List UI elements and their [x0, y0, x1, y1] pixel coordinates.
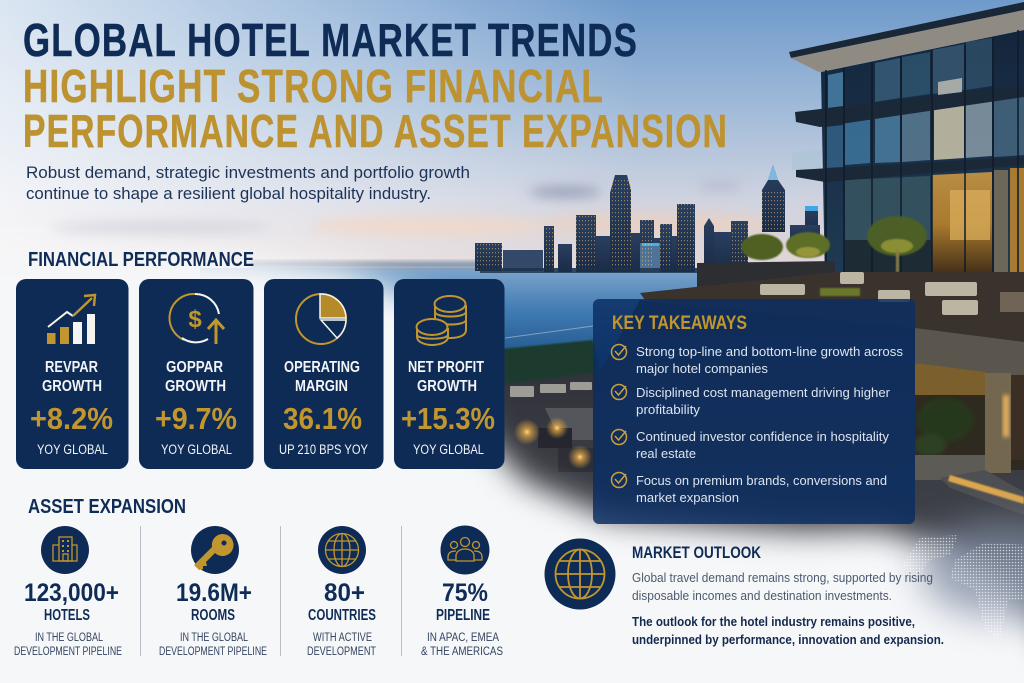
conclusion text: The outlook for the hotel industry remains positive,: [632, 615, 915, 629]
stat: countries: [307, 526, 376, 658]
conclusion text: underpinned by performance, innovation and expansion.: [632, 633, 944, 647]
skyline: [250, 165, 820, 273]
note: UP 210 BPS YOY: [279, 442, 368, 457]
title: [23, 14, 728, 157]
note: YOY GLOBAL: [161, 442, 232, 457]
trees: [741, 216, 927, 272]
takeaway 1: [612, 344, 904, 376]
water: [200, 268, 720, 378]
number: 19.6M+: [176, 579, 252, 607]
icon: pie chart: [296, 294, 346, 344]
takeaway 4: Focus on premium brands, conversions and: [636, 473, 887, 488]
label: OPERATING: [284, 359, 360, 376]
takeaway 3: Continued investor confidence in hospitality: [636, 429, 889, 444]
title: GLOBAL HOTEL MARKET TRENDS: [23, 14, 638, 66]
icon: bar chart with rising arrow: [47, 295, 95, 344]
subtitle: Robust demand, strategic investments and portfolio growth: [26, 164, 470, 182]
card: GOPPAR growth: [139, 279, 254, 469]
takeaway 2: profitability: [636, 402, 701, 417]
heading: financial performance: FINANCIAL PERFORMANCE: [28, 248, 254, 271]
heading: MARKET OUTLOOK: [632, 544, 761, 562]
label: NET PROFIT: [408, 359, 484, 376]
label: HOTELS: [44, 607, 90, 624]
title: PERFORMANCE AND ASSET EXPANSION: [23, 105, 728, 157]
note: YOY GLOBAL: [413, 442, 484, 457]
icon: coin stacks: [416, 296, 466, 345]
takeaway 1: major hotel companies: [636, 361, 768, 376]
card: RevPAR growth: [16, 279, 128, 469]
icon: hotel building: [41, 526, 89, 574]
label: REVPAR: [45, 359, 98, 376]
note: DEVELOPMENT: [307, 646, 376, 658]
subtitle: continue to shape a resilient global hospitality industry.: [26, 185, 431, 203]
conclusion text: [632, 615, 944, 647]
note: YOY GLOBAL: [37, 442, 108, 457]
label: MARGIN: [295, 378, 348, 395]
note: DEVELOPMENT PIPELINE: [14, 646, 122, 658]
stat: pipeline: [421, 526, 503, 658]
label: GROWTH: [42, 378, 102, 395]
body text: [632, 571, 933, 603]
panel: key takeaways: [593, 299, 915, 524]
number: 75%: [442, 579, 488, 607]
icon: globe: [318, 526, 366, 574]
panel: market outlook: [544, 538, 944, 647]
card: net profit growth: [394, 279, 504, 469]
note: IN THE GLOBAL: [35, 632, 103, 644]
label: GROWTH: [417, 378, 477, 395]
heading: asset expansion: ASSET EXPANSION: [28, 495, 186, 518]
note: DEVELOPMENT PIPELINE: [159, 646, 267, 658]
note: [159, 632, 267, 658]
grey mist behind world map: [920, 522, 1024, 618]
note: [307, 632, 376, 658]
icon: key: [191, 526, 239, 574]
value: 36.1%: [283, 401, 362, 436]
stat: hotels: [14, 526, 122, 658]
note: IN APAC, EMEA: [427, 632, 499, 644]
label: [284, 359, 360, 395]
takeaway 3: real estate: [636, 446, 696, 461]
number: 123,000+: [24, 579, 119, 607]
heading: KEY TAKEAWAYS: [612, 313, 747, 334]
icon: dollar cycle with up arrow: $: [188, 306, 202, 333]
stat: rooms: [159, 526, 267, 658]
takeaway 3: [612, 429, 889, 461]
takeaway 4: market expansion: [636, 490, 739, 505]
takeaway 4: [612, 472, 887, 505]
value: +9.7%: [155, 401, 237, 436]
label: [408, 359, 484, 395]
value: +15.3%: [401, 401, 495, 436]
subtitle: [26, 164, 470, 203]
label: ROOMS: [191, 607, 235, 624]
terrace: [482, 261, 1024, 646]
icon: globe: [544, 538, 616, 610]
icon: dollar cycle with up arrow: [169, 294, 224, 344]
world map dots: [902, 535, 1024, 640]
icon: people: [440, 526, 490, 574]
hotel building: [789, 2, 1024, 285]
title: HIGHLIGHT STRONG FINANCIAL: [23, 60, 604, 112]
label: [165, 359, 226, 395]
card: operating margin: [264, 279, 384, 469]
body text: disposable incomes and destination investments.: [632, 589, 892, 603]
takeaway 1: Strong top-line and bottom-line growth across: [636, 344, 904, 359]
note: [14, 632, 122, 658]
label: COUNTRIES: [308, 607, 376, 624]
note: WITH ACTIVE: [313, 632, 372, 644]
number: 80+: [324, 579, 365, 607]
body text: Global travel demand remains strong, supported by rising: [632, 571, 933, 585]
value: +8.2%: [30, 401, 113, 436]
note: [421, 632, 503, 658]
label: GROWTH: [165, 378, 226, 395]
label: PIPELINE: [436, 607, 490, 624]
label: [42, 359, 102, 395]
label: GOPPAR: [166, 359, 223, 376]
takeaway 2: Disciplined cost management driving higher: [636, 385, 891, 400]
note: IN THE GLOBAL: [180, 632, 248, 644]
note: & THE AMERICAS: [421, 646, 503, 658]
takeaway 2: [612, 384, 891, 417]
